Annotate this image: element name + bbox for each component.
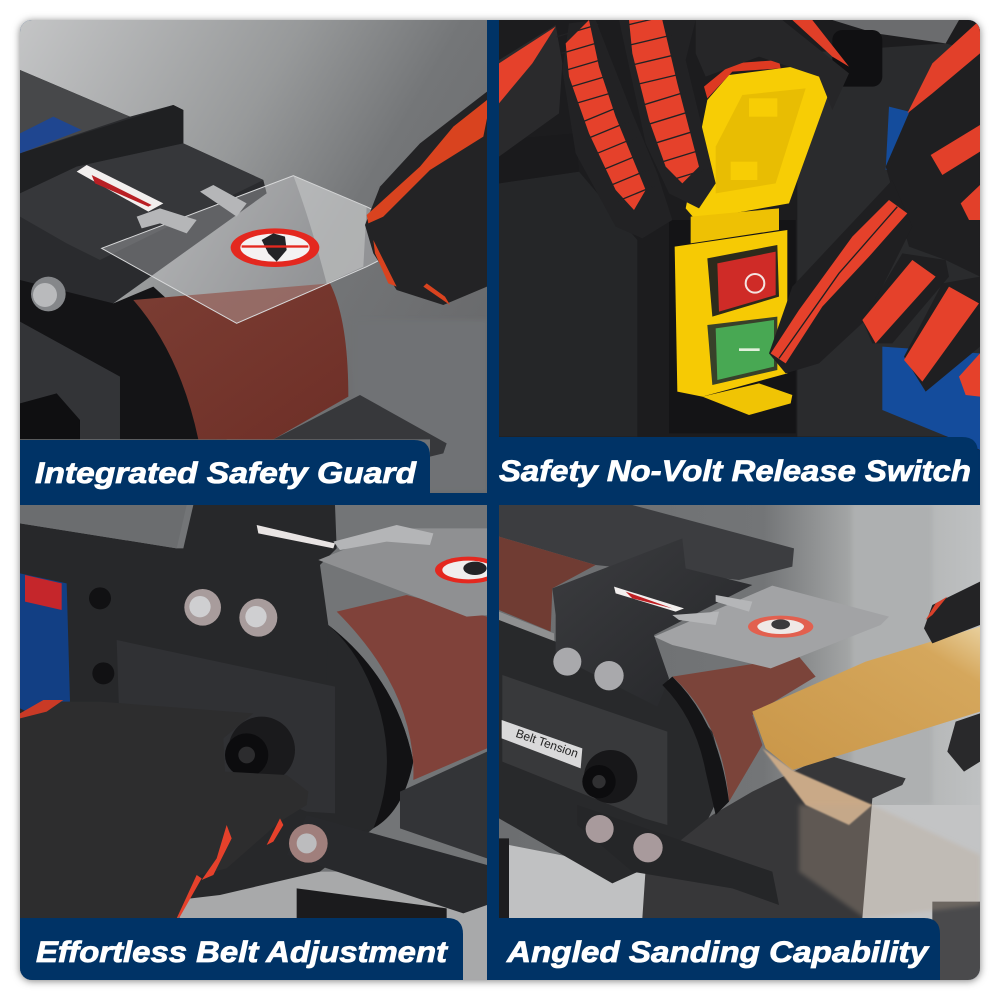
panel: safety no-volt release switch <box>499 20 980 450</box>
housing <box>552 538 752 707</box>
blue plate <box>886 107 909 170</box>
warning sticker <box>748 616 813 638</box>
caption: safety no-volt release switch: Safety No-Volt Release Switch <box>499 455 971 488</box>
red stop button <box>707 245 779 317</box>
machine body <box>499 620 726 883</box>
panel: effortless belt adjustment <box>20 505 502 980</box>
switch backplate <box>669 220 796 433</box>
red strap <box>704 60 781 98</box>
glove <box>365 92 487 305</box>
metal guard <box>654 586 889 668</box>
gloved hand <box>24 702 284 918</box>
tray <box>499 505 794 580</box>
machine body <box>20 70 267 304</box>
caption: effortless belt adjustment <box>20 918 463 980</box>
sanding belt <box>133 283 348 439</box>
sanding belt <box>337 595 487 780</box>
table <box>400 752 487 858</box>
adjust plate <box>502 675 667 825</box>
belt top <box>499 537 596 632</box>
left glove <box>499 20 849 238</box>
rear panel <box>797 43 980 437</box>
panel: integrated safety guard <box>20 20 487 493</box>
yellow flap <box>686 65 832 220</box>
badge <box>20 117 82 153</box>
belt tension label: Belt Tension <box>514 726 580 761</box>
caption: angled sanding capability: Angled Sanding Capability <box>506 936 929 969</box>
left box <box>499 172 637 437</box>
right glove <box>769 20 980 397</box>
warning sticker <box>231 228 319 267</box>
lower housing <box>20 280 227 439</box>
caption: integrated safety guard <box>20 440 430 505</box>
knob <box>230 716 295 775</box>
transparent guard <box>100 175 378 324</box>
yellow switch body <box>675 230 787 397</box>
caption: safety no-volt release switch <box>487 437 978 505</box>
red arrow label <box>77 165 163 212</box>
red arrow label <box>614 587 684 612</box>
green start button <box>707 317 777 385</box>
side panel <box>20 573 70 712</box>
machine body <box>20 505 374 898</box>
glove <box>924 582 980 643</box>
lower background <box>180 872 487 980</box>
panel: angled sanding capability <box>499 505 980 980</box>
adjust plate <box>117 640 335 813</box>
disc rim <box>328 625 413 828</box>
caption: effortless belt adjustment: Effortless Belt Adjustment <box>36 936 449 969</box>
metal guard <box>318 528 487 617</box>
light background <box>852 505 932 805</box>
caption: angled sanding capability <box>487 918 940 980</box>
sanding dust <box>762 748 872 825</box>
bolts <box>553 648 581 676</box>
knob <box>584 750 637 803</box>
bolt <box>31 277 66 311</box>
table <box>273 395 447 457</box>
wood piece <box>752 627 980 770</box>
knob <box>20 393 80 439</box>
table and dust pile <box>642 755 906 918</box>
sanding belt <box>672 657 816 802</box>
bolts <box>184 589 221 626</box>
hinges <box>691 208 779 243</box>
bracket <box>137 208 197 233</box>
belt tension label <box>502 720 582 768</box>
caption: integrated safety guard: Integrated Safety Guard <box>35 457 417 490</box>
bracket <box>577 805 779 905</box>
bracket <box>325 832 487 914</box>
